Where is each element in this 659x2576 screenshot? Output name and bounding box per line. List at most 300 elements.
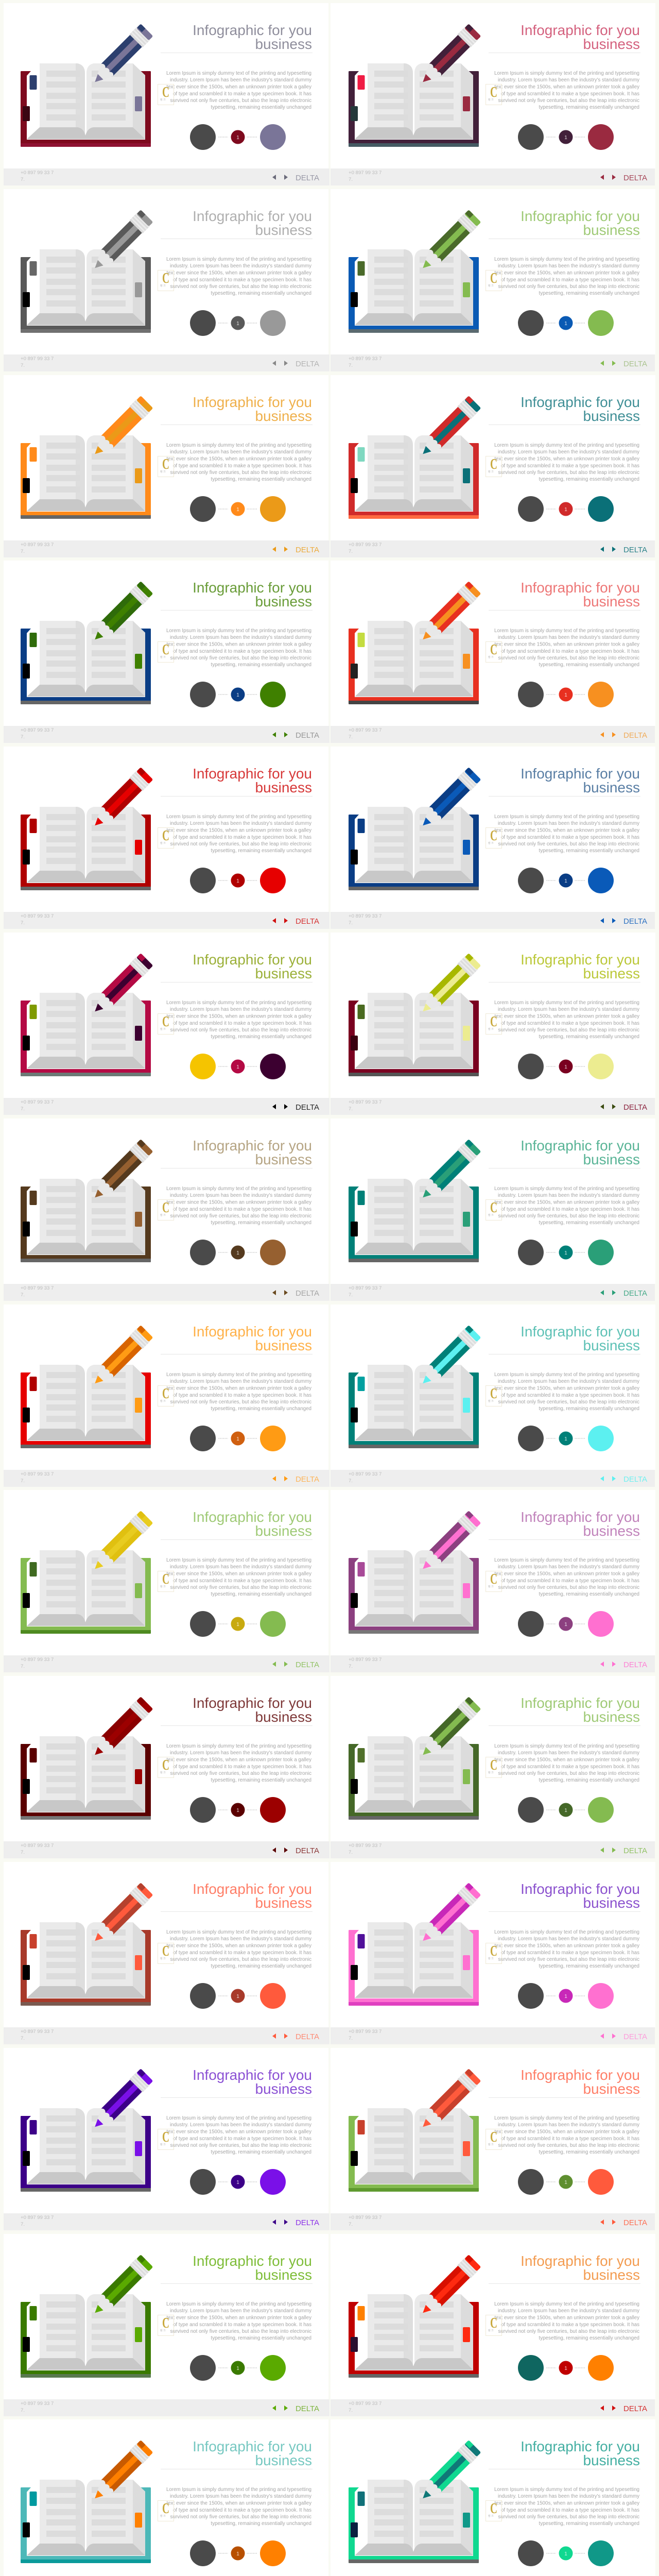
body text: typesetting, remaining essentially unchanged xyxy=(539,1220,639,1226)
watermark logo xyxy=(158,1199,174,1220)
title: Infographic for you xyxy=(521,580,640,596)
body text: industry. Lorem Ipsum has been the industry's standard dummy xyxy=(498,1750,639,1756)
footer bar xyxy=(4,1284,330,1301)
title: business xyxy=(583,594,640,609)
title: business xyxy=(255,594,312,609)
watermark logo: C xyxy=(490,828,497,844)
body text: survived not only five centuries, but also the leap into electronic xyxy=(498,284,639,290)
body text: typesetting, remaining essentially unchanged xyxy=(539,2335,639,2341)
watermark logo: C xyxy=(162,1386,169,1402)
slide background xyxy=(4,1304,328,1470)
body text: typesetting, remaining essentially unchanged xyxy=(539,662,639,668)
footer phone number: 7. xyxy=(21,920,25,926)
icon: pencil xyxy=(417,581,481,646)
navigation arrows xyxy=(272,918,288,923)
brand name: DELTA xyxy=(296,2032,319,2041)
footer bar xyxy=(331,912,655,929)
watermark logo xyxy=(158,1386,174,1406)
book illustration xyxy=(349,2480,479,2563)
connected circles diagram: 1 xyxy=(236,1064,239,1070)
footer phone number: +0 897 99 33 7 xyxy=(349,1285,381,1291)
body text: industry. Lorem Ipsum has been the industry's standard dummy xyxy=(170,77,311,83)
panel: slide 18 xyxy=(331,1490,655,1672)
body text: survived not only five centuries, but also the leap into electronic xyxy=(170,1585,311,1590)
icon: pencil xyxy=(417,2439,481,2505)
watermark logo xyxy=(486,642,501,663)
body text: Lorem Ipsum is simply dummy text of the printing and typesetting xyxy=(494,1372,639,1378)
watermark logo xyxy=(486,2501,501,2521)
watermark logo: C xyxy=(490,1200,497,1216)
book illustration xyxy=(21,1179,151,1262)
panel: slide 26 xyxy=(331,2234,655,2416)
brand name: DELTA xyxy=(296,1475,319,1484)
body text: text ever since the 1500s, when an unknown printer took a galley xyxy=(166,270,311,276)
watermark logo: C xyxy=(490,2129,497,2145)
body text: industry. Lorem Ipsum has been the industry's standard dummy xyxy=(170,1379,311,1384)
body text: survived not only five centuries, but also the leap into electronic xyxy=(170,1957,311,1962)
slide background xyxy=(4,747,328,912)
icon: pencil xyxy=(417,953,481,1018)
slide background xyxy=(4,1490,328,1655)
footer phone number: 7. xyxy=(349,734,353,740)
book illustration xyxy=(349,1179,479,1262)
watermark logo xyxy=(486,1757,501,1777)
icon: pencil xyxy=(417,395,481,461)
book illustration xyxy=(21,435,151,519)
footer phone number: +0 897 99 33 7 xyxy=(349,170,381,176)
footer bar xyxy=(331,168,655,185)
body text: Lorem Ipsum is simply dummy text of the printing and typesetting xyxy=(494,71,639,76)
body text: of type and scrambled it to make a type specimen book. It has xyxy=(501,1021,639,1026)
body text: of type and scrambled it to make a type specimen book. It has xyxy=(173,2136,311,2142)
footer bar xyxy=(331,1098,655,1115)
navigation arrows xyxy=(600,361,616,366)
footer phone number: 7. xyxy=(21,2036,25,2041)
navigation arrows xyxy=(272,361,288,366)
title: business xyxy=(255,222,312,238)
connected circles diagram xyxy=(190,1426,286,1451)
icon: pencil xyxy=(417,1882,481,1947)
footer phone number: +0 897 99 33 7 xyxy=(349,356,381,362)
footer bar xyxy=(4,1098,330,1115)
body text: typesetting, remaining essentially unchanged xyxy=(539,1406,639,1412)
book illustration xyxy=(21,1365,151,1448)
footer phone number: +0 897 99 33 7 xyxy=(349,1657,381,1663)
connected circles diagram xyxy=(518,124,614,150)
body text: of type and scrambled it to make a type specimen book. It has xyxy=(501,1393,639,1398)
watermark logo xyxy=(486,1199,501,1220)
navigation arrows xyxy=(272,1290,288,1295)
body text: text ever since the 1500s, when an unknown printer took a galley xyxy=(166,2315,311,2320)
connected circles diagram: 1 xyxy=(236,1994,239,1999)
connected circles diagram xyxy=(190,496,286,522)
panel: slide 9 xyxy=(4,747,330,929)
footer phone number: 7. xyxy=(21,549,25,554)
title: Infographic for you xyxy=(521,1881,640,1897)
panel: slide 20 xyxy=(331,1676,655,1858)
connected circles diagram xyxy=(190,1611,286,1637)
watermark logo: C xyxy=(162,270,169,286)
watermark logo xyxy=(486,827,501,848)
body text: Lorem Ipsum is simply dummy text of the printing and typesetting xyxy=(494,1557,639,1563)
body text: Lorem Ipsum is simply dummy text of the printing and typesetting xyxy=(494,1743,639,1749)
body text: industry. Lorem Ipsum has been the industry's standard dummy xyxy=(498,449,639,455)
body text: text ever since the 1500s, when an unknown printer took a galley xyxy=(494,1757,639,1763)
body text: of type and scrambled it to make a type specimen book. It has xyxy=(501,649,639,654)
footer bar xyxy=(331,1470,655,1487)
body text: of type and scrambled it to make a type specimen book. It has xyxy=(173,1764,311,1770)
body text: of type and scrambled it to make a type specimen book. It has xyxy=(501,2136,639,2142)
book illustration xyxy=(349,807,479,890)
body text: of type and scrambled it to make a type specimen book. It has xyxy=(173,1021,311,1026)
slide background xyxy=(331,375,655,540)
body text: survived not only five centuries, but also the leap into electronic xyxy=(170,98,311,104)
title: business xyxy=(583,1523,640,1539)
icon: pencil xyxy=(89,953,153,1018)
watermark logo xyxy=(158,456,174,477)
footer bar xyxy=(4,1655,330,1672)
connected circles diagram xyxy=(518,682,614,707)
body text: survived not only five centuries, but also the leap into electronic xyxy=(170,841,311,847)
body text: Lorem Ipsum is simply dummy text of the printing and typesetting xyxy=(494,628,639,634)
brand name: DELTA xyxy=(623,546,647,554)
watermark logo xyxy=(486,456,501,477)
slide background xyxy=(4,1676,328,1841)
panel: slide 25 xyxy=(4,2234,330,2416)
connected circles diagram xyxy=(190,1054,286,1079)
footer phone number: +0 897 99 33 7 xyxy=(21,1657,54,1663)
title: business xyxy=(255,1709,312,1725)
icon: pencil xyxy=(417,1510,481,1575)
book illustration xyxy=(21,2480,151,2563)
footer bar xyxy=(331,540,655,557)
connected circles diagram: 1 xyxy=(236,321,239,327)
connected circles diagram xyxy=(190,1983,286,2009)
navigation arrows xyxy=(600,547,616,552)
body text: Lorem Ipsum is simply dummy text of the printing and typesetting xyxy=(166,2487,311,2493)
body text: text ever since the 1500s, when an unknown printer took a galley xyxy=(494,84,639,90)
brand name: DELTA xyxy=(623,1103,647,1112)
footer bar xyxy=(331,354,655,371)
book illustration xyxy=(21,2294,151,2378)
navigation arrows xyxy=(600,1104,616,1109)
body text: text ever since the 1500s, when an unknown printer took a galley xyxy=(166,456,311,462)
footer bar xyxy=(4,1470,330,1487)
slide background xyxy=(331,1304,655,1470)
body text: of type and scrambled it to make a type specimen book. It has xyxy=(173,463,311,469)
body text: text ever since the 1500s, when an unknown printer took a galley xyxy=(494,2501,639,2506)
brand name: DELTA xyxy=(296,2218,319,2227)
body text: industry. Lorem Ipsum has been the industry's standard dummy xyxy=(170,2122,311,2128)
title: business xyxy=(255,1151,312,1167)
panel: slide 1 xyxy=(4,3,330,185)
connected circles diagram: 1 xyxy=(564,135,567,141)
icon: pencil xyxy=(89,23,153,89)
title: business xyxy=(583,1709,640,1725)
brand name: DELTA xyxy=(296,1289,319,1298)
navigation arrows xyxy=(600,918,616,923)
body text: survived not only five centuries, but also the leap into electronic xyxy=(498,1957,639,1962)
body text: Lorem Ipsum is simply dummy text of the printing and typesetting xyxy=(494,2487,639,2493)
footer bar xyxy=(4,726,330,743)
title: business xyxy=(255,1895,312,1911)
title: Infographic for you xyxy=(193,952,312,968)
footer phone number: +0 897 99 33 7 xyxy=(349,1843,381,1849)
connected circles diagram: 1 xyxy=(564,1436,567,1442)
slide background xyxy=(4,1118,328,1284)
watermark logo: 템 크 xyxy=(160,2143,166,2146)
icon: pencil xyxy=(89,1696,153,1761)
connected circles diagram: 1 xyxy=(236,1622,239,1628)
footer bar xyxy=(331,1655,655,1672)
icon: pencil xyxy=(417,2068,481,2133)
connected circles diagram: 1 xyxy=(564,878,567,884)
footer phone number: 7. xyxy=(21,1292,25,1298)
watermark logo xyxy=(158,2129,174,2149)
footer phone number: +0 897 99 33 7 xyxy=(21,356,54,362)
body text: Lorem Ipsum is simply dummy text of the printing and typesetting xyxy=(494,814,639,820)
footer phone number: 7. xyxy=(21,2408,25,2413)
footer bar xyxy=(331,1284,655,1301)
connected circles diagram xyxy=(518,2169,614,2195)
body text: Lorem Ipsum is simply dummy text of the printing and typesetting xyxy=(494,443,639,448)
slide background xyxy=(331,561,655,726)
connected circles diagram: 1 xyxy=(236,878,239,884)
connected circles diagram: 1 xyxy=(236,1808,239,1814)
title: Infographic for you xyxy=(193,2253,312,2269)
brand name: DELTA xyxy=(623,360,647,368)
connected circles diagram xyxy=(518,1611,614,1637)
title: Infographic for you xyxy=(193,208,312,224)
footer phone number: 7. xyxy=(21,363,25,368)
navigation arrows xyxy=(600,2219,616,2225)
slide background xyxy=(331,189,655,354)
slide background xyxy=(331,2419,655,2576)
panel: slide 24 xyxy=(331,2048,655,2230)
watermark logo xyxy=(158,1943,174,1964)
icon: pencil xyxy=(89,209,153,275)
footer bar xyxy=(4,2213,330,2230)
brand name: DELTA xyxy=(296,1660,319,1669)
panel: slide 23 xyxy=(4,2048,330,2230)
title: business xyxy=(583,779,640,795)
body text: text ever since the 1500s, when an unknown printer took a galley xyxy=(494,1943,639,1948)
watermark logo: C xyxy=(162,2315,169,2331)
watermark logo: 템 크 xyxy=(160,1771,166,1774)
slide background xyxy=(4,561,328,726)
slide background xyxy=(4,375,328,540)
watermark logo: 템 크 xyxy=(488,1399,494,1403)
body text: typesetting, remaining essentially unchanged xyxy=(211,1034,311,1040)
body text: of type and scrambled it to make a type specimen book. It has xyxy=(501,1578,639,1584)
body text: typesetting, remaining essentially unchanged xyxy=(211,2521,311,2527)
body text: industry. Lorem Ipsum has been the industry's standard dummy xyxy=(498,263,639,269)
watermark logo xyxy=(486,1386,501,1406)
body text: industry. Lorem Ipsum has been the industry's standard dummy xyxy=(498,77,639,83)
footer phone number: 7. xyxy=(349,920,353,926)
watermark logo: 템 크 xyxy=(488,2329,494,2332)
watermark logo: 템 크 xyxy=(488,655,494,659)
title: Infographic for you xyxy=(521,394,640,410)
footer phone number: 7. xyxy=(349,1292,353,1298)
body text: industry. Lorem Ipsum has been the industry's standard dummy xyxy=(498,1379,639,1384)
footer phone number: 7. xyxy=(21,1850,25,1855)
footer phone number: 7. xyxy=(21,1478,25,1484)
footer phone number: +0 897 99 33 7 xyxy=(21,1099,54,1105)
panel: slide 6 xyxy=(331,375,655,557)
icon: pencil xyxy=(417,209,481,275)
body text: of type and scrambled it to make a type specimen book. It has xyxy=(501,91,639,97)
body text: of type and scrambled it to make a type specimen book. It has xyxy=(173,1393,311,1398)
navigation arrows xyxy=(272,1848,288,1853)
title: business xyxy=(255,779,312,795)
panel: slide 17 xyxy=(4,1490,330,1672)
connected circles diagram: 1 xyxy=(564,1250,567,1256)
body text: industry. Lorem Ipsum has been the industry's standard dummy xyxy=(170,2494,311,2499)
body text: typesetting, remaining essentially unchanged xyxy=(539,1591,639,1597)
connected circles diagram: 1 xyxy=(236,692,239,698)
body text: typesetting, remaining essentially unchanged xyxy=(211,1220,311,1226)
panel: slide 14 xyxy=(331,1118,655,1301)
title: business xyxy=(255,1523,312,1539)
watermark logo: C xyxy=(490,1757,497,1773)
navigation arrows xyxy=(272,732,288,737)
body text: industry. Lorem Ipsum has been the industry's standard dummy xyxy=(170,821,311,826)
watermark logo: C xyxy=(490,2501,497,2517)
watermark logo: 템 크 xyxy=(160,655,166,659)
footer phone number: +0 897 99 33 7 xyxy=(349,542,381,548)
brand name: DELTA xyxy=(623,1289,647,1298)
connected circles diagram: 1 xyxy=(564,1622,567,1628)
body text: industry. Lorem Ipsum has been the industry's standard dummy xyxy=(498,1007,639,1012)
icon: pencil xyxy=(417,2254,481,2319)
footer phone number: 7. xyxy=(349,2222,353,2227)
footer phone number: +0 897 99 33 7 xyxy=(21,2215,54,2221)
connected circles diagram xyxy=(518,1054,614,1079)
icon: pencil xyxy=(89,767,153,832)
body text: typesetting, remaining essentially unchanged xyxy=(211,2149,311,2155)
footer phone number: +0 897 99 33 7 xyxy=(21,1471,54,1477)
body text: of type and scrambled it to make a type specimen book. It has xyxy=(501,835,639,840)
title: business xyxy=(583,965,640,981)
title: business xyxy=(583,36,640,52)
watermark logo: 템 크 xyxy=(488,98,494,101)
body text: survived not only five centuries, but also the leap into electronic xyxy=(498,1771,639,1776)
footer phone number: +0 897 99 33 7 xyxy=(349,913,381,919)
panel: slide 3 xyxy=(4,189,330,371)
body text: Lorem Ipsum is simply dummy text of the printing and typesetting xyxy=(166,257,311,262)
watermark logo: C xyxy=(490,1943,497,1959)
panel: slide 22 xyxy=(331,1862,655,2044)
connected circles diagram: 1 xyxy=(564,1808,567,1814)
footer phone number: 7. xyxy=(21,1106,25,1112)
panel: slide 10 xyxy=(331,747,655,929)
body text: Lorem Ipsum is simply dummy text of the printing and typesetting xyxy=(166,71,311,76)
connected circles diagram: 1 xyxy=(564,321,567,327)
book illustration xyxy=(21,621,151,704)
icon: pencil xyxy=(89,1510,153,1575)
watermark logo: C xyxy=(162,1943,169,1959)
body text: text ever since the 1500s, when an unknown printer took a galley xyxy=(166,2501,311,2506)
watermark logo: C xyxy=(490,456,497,472)
footer phone number: +0 897 99 33 7 xyxy=(21,1843,54,1849)
watermark logo xyxy=(158,1014,174,1035)
book illustration xyxy=(349,1736,479,1820)
connected circles diagram: 1 xyxy=(564,2366,567,2371)
book illustration xyxy=(349,1550,479,1634)
body text: typesetting, remaining essentially unchanged xyxy=(539,105,639,110)
watermark logo: 템 크 xyxy=(160,1957,166,1960)
panel: slide 2 xyxy=(331,3,655,185)
body text: text ever since the 1500s, when an unknown printer took a galley xyxy=(166,1757,311,1763)
footer phone number: 7. xyxy=(21,2222,25,2227)
body text: Lorem Ipsum is simply dummy text of the printing and typesetting xyxy=(166,2115,311,2121)
body text: of type and scrambled it to make a type specimen book. It has xyxy=(173,649,311,654)
body text: typesetting, remaining essentially unchanged xyxy=(539,1777,639,1783)
connected circles diagram xyxy=(190,2355,286,2381)
connected circles diagram xyxy=(518,868,614,893)
book illustration xyxy=(349,1365,479,1448)
navigation arrows xyxy=(600,2033,616,2039)
navigation arrows xyxy=(600,175,616,180)
navigation arrows xyxy=(272,1476,288,1481)
body text: typesetting, remaining essentially unchanged xyxy=(211,1406,311,1412)
book illustration xyxy=(349,993,479,1076)
connected circles diagram xyxy=(190,2169,286,2195)
body text: of type and scrambled it to make a type specimen book. It has xyxy=(501,2507,639,2513)
body text: text ever since the 1500s, when an unknown printer took a galley xyxy=(494,642,639,647)
footer phone number: 7. xyxy=(349,1106,353,1112)
body text: typesetting, remaining essentially unchanged xyxy=(539,2149,639,2155)
title: business xyxy=(583,2081,640,2097)
body text: text ever since the 1500s, when an unknown printer took a galley xyxy=(494,2129,639,2135)
footer phone number: 7. xyxy=(21,1664,25,1669)
body text: typesetting, remaining essentially unchanged xyxy=(539,2521,639,2527)
body text: industry. Lorem Ipsum has been the industry's standard dummy xyxy=(170,449,311,455)
watermark logo: 템 크 xyxy=(488,2143,494,2146)
title: business xyxy=(255,2081,312,2097)
body text: Lorem Ipsum is simply dummy text of the printing and typesetting xyxy=(166,1186,311,1192)
panel: slide 4 xyxy=(331,189,655,371)
navigation arrows xyxy=(600,732,616,737)
body text: industry. Lorem Ipsum has been the industry's standard dummy xyxy=(170,2308,311,2314)
body text: industry. Lorem Ipsum has been the industry's standard dummy xyxy=(498,2494,639,2499)
body text: Lorem Ipsum is simply dummy text of the printing and typesetting xyxy=(166,2301,311,2307)
book illustration xyxy=(349,621,479,704)
title: Infographic for you xyxy=(193,766,312,782)
slide background xyxy=(331,1862,655,2027)
connected circles diagram: 1 xyxy=(236,1436,239,1442)
panel: slide 8 xyxy=(331,561,655,743)
watermark logo: 템 크 xyxy=(160,1027,166,1031)
body text: survived not only five centuries, but also the leap into electronic xyxy=(498,470,639,476)
watermark logo: 템 크 xyxy=(160,1399,166,1403)
footer phone number: 7. xyxy=(349,1478,353,1484)
body text: text ever since the 1500s, when an unknown printer took a galley xyxy=(494,1386,639,1391)
icon: pencil xyxy=(89,2439,153,2505)
brand name: DELTA xyxy=(296,2404,319,2413)
connected circles diagram xyxy=(518,2540,614,2566)
body text: survived not only five centuries, but also the leap into electronic xyxy=(498,1399,639,1405)
body text: survived not only five centuries, but also the leap into electronic xyxy=(498,1585,639,1590)
body text: of type and scrambled it to make a type specimen book. It has xyxy=(501,1764,639,1770)
connected circles diagram xyxy=(518,1983,614,2009)
footer phone number: +0 897 99 33 7 xyxy=(21,727,54,733)
book illustration xyxy=(349,1922,479,2006)
body text: survived not only five centuries, but also the leap into electronic xyxy=(498,655,639,661)
connected circles diagram: 1 xyxy=(564,2551,567,2557)
panel: slide 16 xyxy=(331,1304,655,1487)
